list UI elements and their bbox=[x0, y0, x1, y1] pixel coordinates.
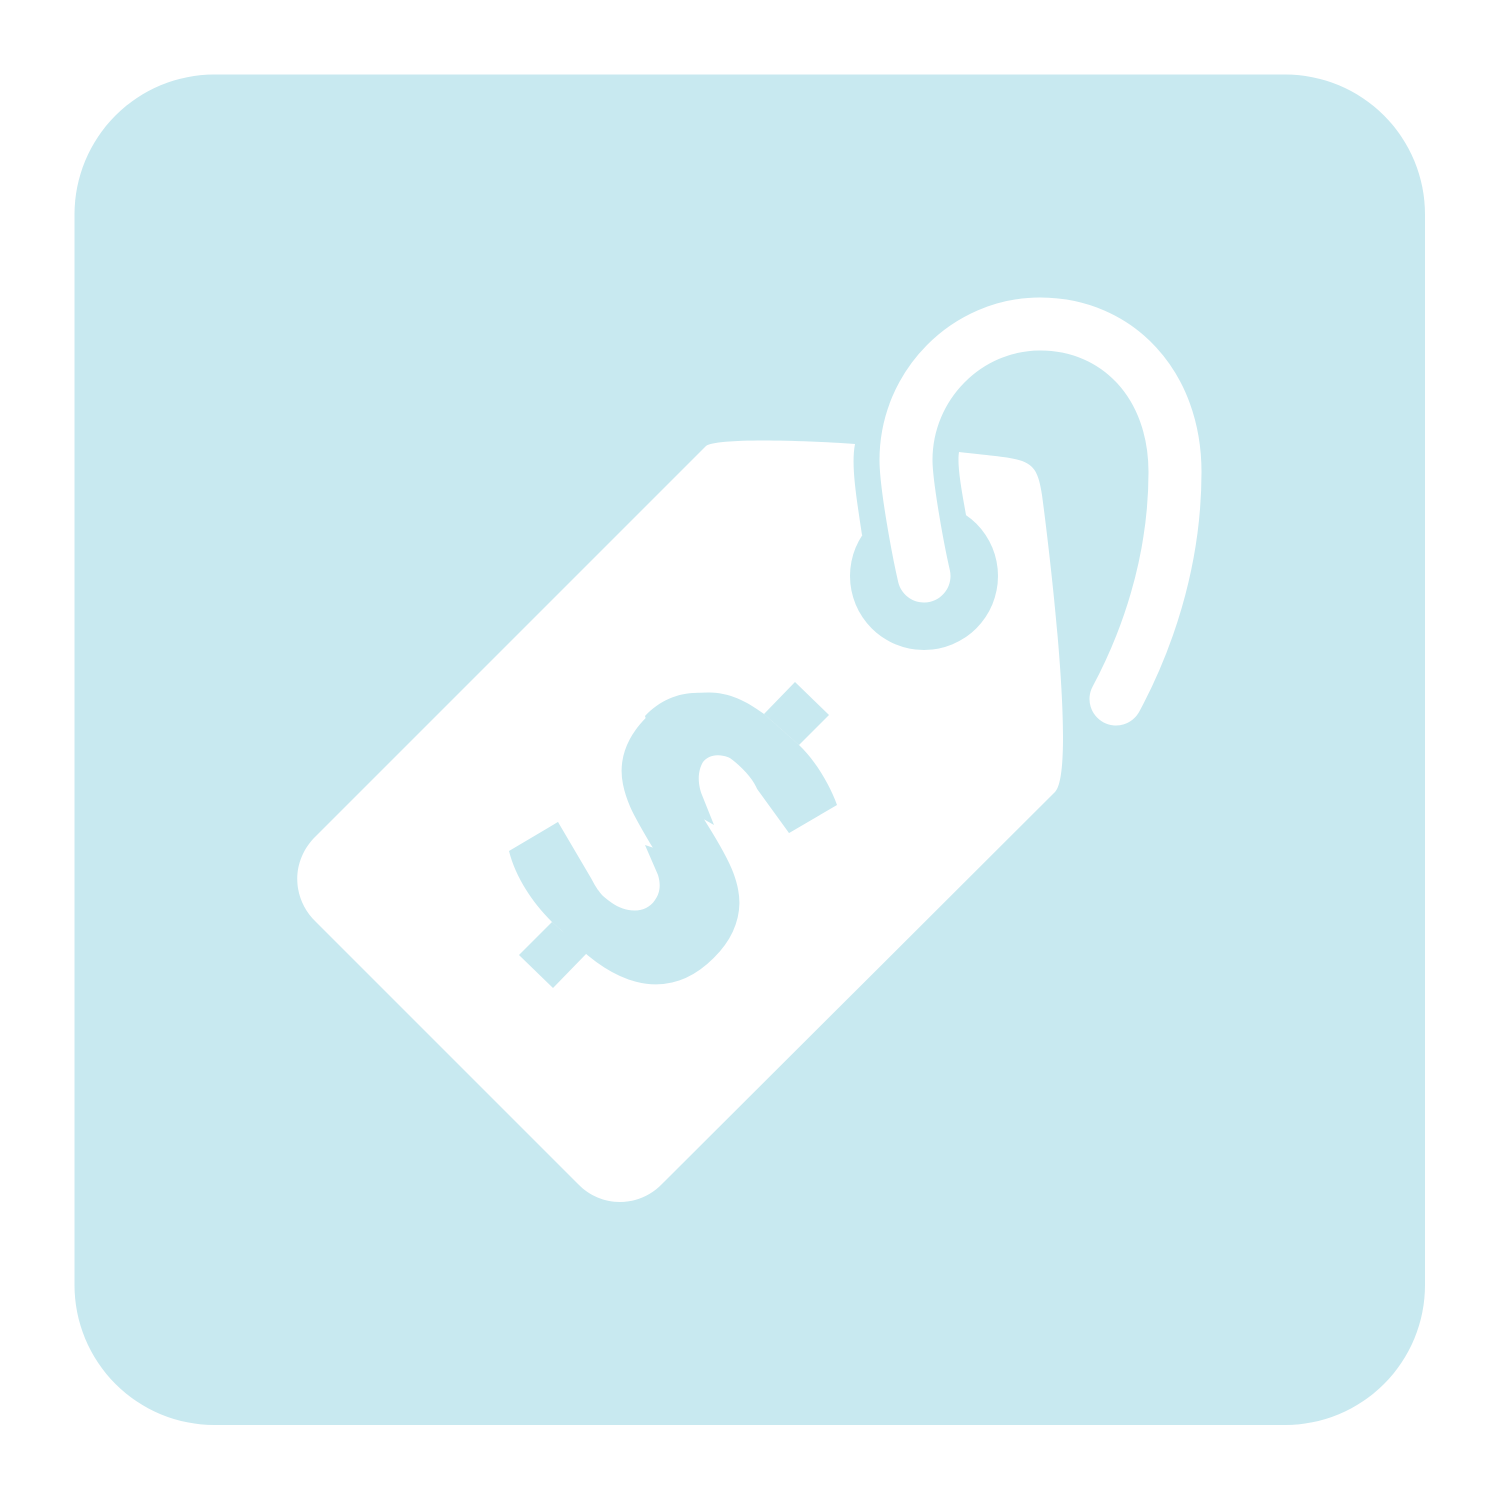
dollar sign bbox=[431, 592, 920, 1081]
tag eyelet hole bbox=[850, 502, 998, 650]
dollar sign top stub bbox=[764, 682, 829, 745]
dollar sign bottom stub bbox=[519, 922, 587, 988]
dollar sign lower arm bbox=[509, 822, 710, 975]
dollar sign letter S: S bbox=[431, 592, 920, 1081]
tag body bbox=[297, 440, 1063, 1202]
icon: price tag bbox=[297, 324, 1175, 1202]
dollar sign upper arm bbox=[645, 692, 837, 833]
string loop bbox=[906, 324, 1175, 699]
